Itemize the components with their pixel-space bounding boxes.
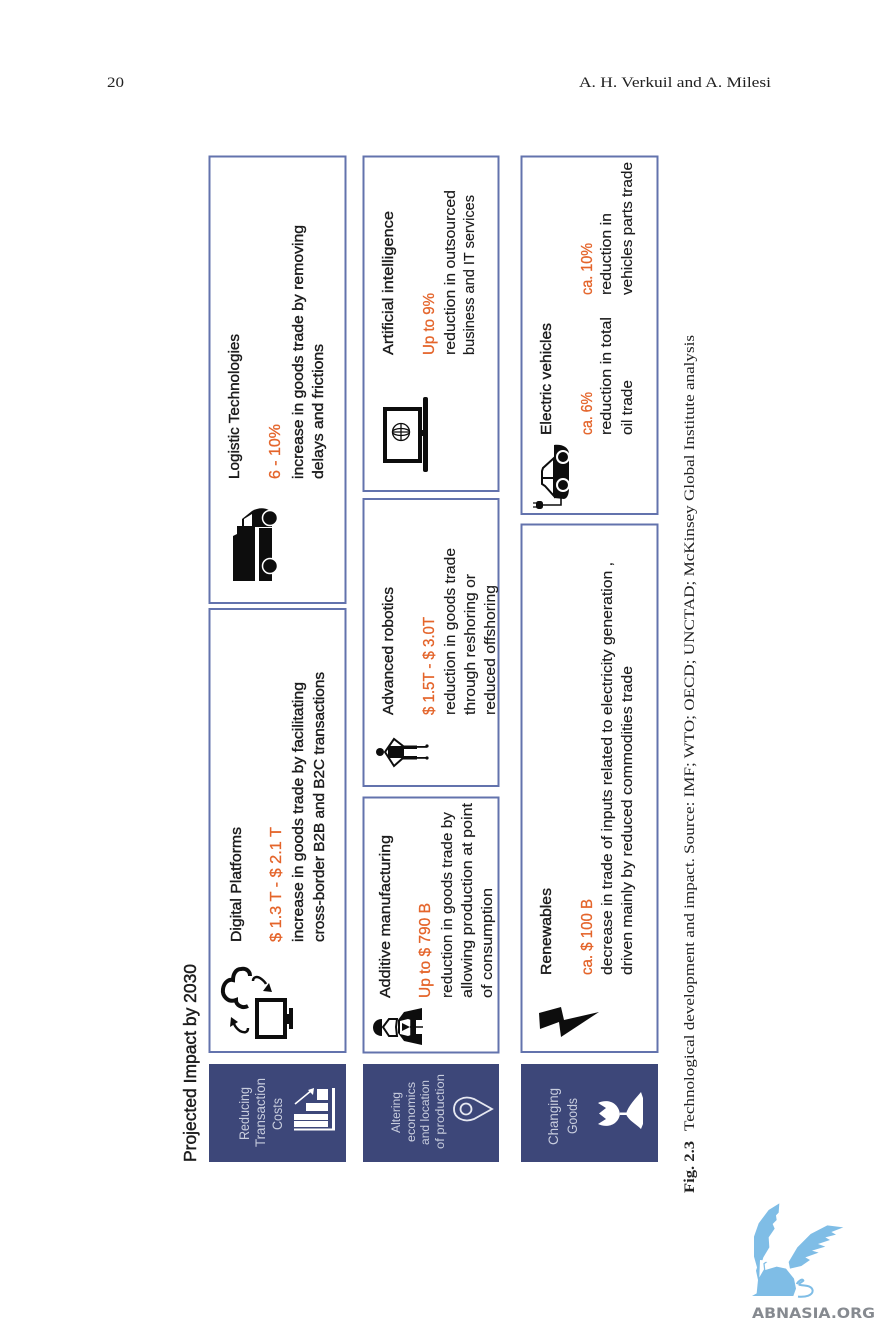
panel: logistic technologies	[210, 156, 346, 603]
text: electric vehicles: ca. 6%	[579, 392, 596, 435]
text: renewables: Renewables	[538, 888, 555, 975]
text: renewables: ca. $ 100 B	[579, 899, 596, 975]
text: digital platforms	[228, 672, 328, 942]
label: reducing transaction costs: Reducing	[237, 1087, 252, 1140]
text: renewables	[538, 562, 636, 975]
label: changing goods: Goods	[565, 1098, 580, 1134]
text: additive manufacturing: Up to $ 790 B	[417, 903, 434, 998]
text: artificial intelligence: reduction in outsourced	[442, 190, 459, 355]
text: logistic technologies: increase in goods trade by removing	[290, 225, 307, 479]
text: logistic technologies: 6 - 10%	[267, 424, 284, 479]
text: artificial intelligence	[380, 190, 478, 355]
text: advanced robotics: through reshoring or	[462, 574, 479, 715]
page number: 20	[107, 75, 124, 91]
running header: A. H. Verkuil and A. Milesi	[579, 75, 771, 91]
text: logistic technologies	[226, 225, 327, 479]
panel: reducing transaction costs	[209, 1064, 346, 1162]
text: advanced robotics: Advanced robotics	[380, 587, 397, 715]
text: digital platforms: cross-border B2B and B2C transactions	[311, 672, 328, 942]
label: changing goods	[546, 1088, 580, 1145]
text: artificial intelligence: business and IT services	[461, 195, 478, 355]
panel: changing goods	[521, 1064, 658, 1162]
text: digital platforms: $ 1.3 T - $ 2.1 T	[268, 826, 285, 942]
text: additive manufacturing: allowing production at point	[459, 802, 476, 998]
icon: electric car	[533, 445, 569, 509]
text: additive manufacturing: reduction in goods trade by	[439, 811, 456, 998]
panel: renewables	[522, 524, 658, 1052]
figure caption: Technological development and impact. Source: IMF; WTO; OECD; UNCTAD; McKinsey Global Institute analysis	[682, 335, 698, 1131]
logo: griffin	[752, 1203, 843, 1297]
icon: truck	[233, 508, 278, 581]
label: altering economics	[391, 1074, 447, 1149]
icon: robot figure	[376, 739, 429, 766]
label: altering economics: Altering	[391, 1092, 403, 1133]
text: digital platforms: Digital Platforms	[228, 827, 245, 942]
text: electric vehicles: reduction in	[598, 213, 615, 295]
text: electric vehicles: reduction in total	[598, 317, 615, 435]
text: advanced robotics: $ 1.5T - $ 3.0T	[421, 616, 438, 715]
text: additive manufacturing	[377, 802, 496, 998]
text: renewables: driven mainly by reduced commodities trade	[619, 666, 636, 975]
label: reducing transaction costs: Transaction	[253, 1078, 268, 1147]
label: altering economics: economics	[406, 1082, 418, 1142]
panel: altering economics and location of production	[363, 1064, 499, 1162]
label: changing goods: Changing	[546, 1088, 561, 1145]
text: advanced robotics: reduced offshoring	[482, 585, 499, 715]
icon: tulip	[598, 1092, 643, 1129]
logo wordmark: ABNASIA.ORG	[752, 1306, 875, 1322]
text: artificial intelligence: Up to 9%	[421, 293, 438, 355]
icon: bar chart	[294, 1088, 335, 1130]
panel: advanced robotics	[364, 499, 499, 786]
label: altering economics: and location	[420, 1080, 432, 1145]
text: electric vehicles: vehicles parts trade	[619, 162, 636, 295]
text: additive manufacturing: Additive manufacturing	[377, 835, 394, 998]
text: electric vehicles: oil trade	[619, 380, 636, 435]
icon: worker	[373, 1008, 423, 1045]
text: logistic technologies: delays and frictions	[310, 344, 327, 479]
text: advanced robotics	[380, 548, 499, 715]
text: advanced robotics: reduction in goods trade	[442, 548, 459, 715]
text: logistic technologies: Logistic Technologies	[226, 334, 243, 479]
text: additive manufacturing: of consumption	[479, 888, 496, 998]
panel: artificial intelligence	[364, 156, 498, 491]
figure caption: Fig. 2.3	[682, 1141, 698, 1193]
rotated figure	[180, 156, 658, 1162]
label: reducing transaction costs	[237, 1078, 285, 1147]
icon: laptop with globe	[385, 397, 428, 472]
panel: additive manufacturing	[364, 798, 498, 1052]
text: electric vehicles: Electric vehicles	[538, 323, 555, 435]
text: electric vehicles: ca. 10%	[579, 243, 596, 295]
text: digital platforms: increase in goods trade by facilitating	[290, 682, 307, 942]
label: altering economics: of production	[435, 1074, 447, 1149]
icon: cloud and monitor	[223, 969, 293, 1037]
text: artificial intelligence: Artificial intelligence	[380, 211, 397, 355]
text: renewables: decrease in trade of inputs related to electricity generation ,	[599, 562, 616, 975]
icon: lightning bolt	[539, 1007, 599, 1037]
panel: digital platforms	[210, 609, 346, 1052]
text: electric vehicles	[538, 162, 636, 435]
icon: location pin	[454, 1098, 492, 1120]
panel: electric vehicles	[522, 156, 658, 514]
heading: Projected Impact by 2030	[180, 964, 200, 1162]
label: reducing transaction costs: Costs	[270, 1098, 285, 1130]
